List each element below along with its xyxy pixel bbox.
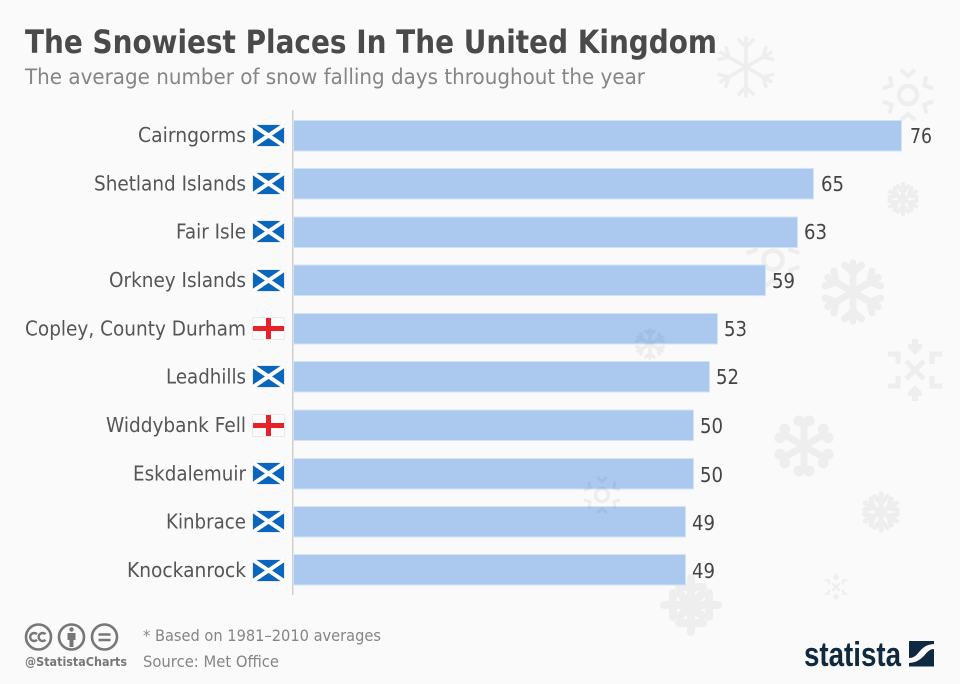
row: Cairngorms: Cairngorms xyxy=(138,123,246,147)
snowflake: dense lower right xyxy=(862,494,900,530)
row: Cairngorms xyxy=(138,120,932,151)
snowflake: bottom cross xyxy=(664,578,718,632)
row: Shetland Islands: Shetland Islands xyxy=(94,172,246,196)
footnote: * Based on 1981–2010 averages xyxy=(143,626,381,645)
row: Knockanrock: Knockanrock xyxy=(127,558,246,582)
row: Fair Isle: Fair Isle xyxy=(176,220,246,244)
row: Kinbrace: Kinbrace xyxy=(166,510,246,534)
row: Eskdalemuir: 50 xyxy=(700,463,723,487)
snowflake: arrows right xyxy=(888,339,942,401)
row: Eskdalemuir xyxy=(133,458,723,489)
row: Leadhills xyxy=(166,362,739,392)
snowflake: tiny arrows xyxy=(825,574,847,600)
row: Leadhills: Leadhills xyxy=(166,364,246,388)
handle: @StatistaCharts xyxy=(25,654,127,669)
row: Shetland Islands xyxy=(94,168,844,199)
row: Widdybank Fell: Widdybank Fell xyxy=(106,413,246,437)
snowflake: top right sun xyxy=(883,70,933,120)
row: Knockanrock: 49 xyxy=(692,559,715,583)
row: Kinbrace xyxy=(166,506,715,537)
snowflake: small dense right xyxy=(887,184,919,214)
creative commons icons xyxy=(26,624,117,650)
row: Widdybank Fell xyxy=(106,410,723,440)
statista logo: statista xyxy=(804,636,902,674)
row: Knockanrock xyxy=(127,554,715,585)
snowflake: over bar, centre xyxy=(636,330,664,358)
snowflake: heart ends xyxy=(772,416,836,476)
row: Orkney Islands xyxy=(109,265,795,296)
row: Leadhills: 52 xyxy=(716,365,739,389)
row: Copley, County Durham: 53 xyxy=(724,317,747,341)
row: Kinbrace: 49 xyxy=(692,511,715,535)
row: Shetland Islands: 65 xyxy=(821,172,844,196)
subtitle: The average number of snow falling days throughout the year xyxy=(24,65,645,90)
row: Copley, County Durham: Copley, County Durham xyxy=(25,316,246,340)
row: Widdybank Fell: 50 xyxy=(700,414,723,438)
row: Orkney Islands: Orkney Islands xyxy=(109,268,246,292)
row: Fair Isle: 63 xyxy=(804,220,827,244)
bar chart xyxy=(25,120,932,585)
snowflake: behind bars xyxy=(747,234,799,286)
row: Cairngorms: 76 xyxy=(910,124,932,148)
snowflake: thick right xyxy=(823,263,883,321)
row: Orkney Islands: 59 xyxy=(772,269,795,293)
row: Fair Isle xyxy=(176,217,827,248)
source: Source: Met Office xyxy=(143,652,279,671)
axis line xyxy=(292,110,294,595)
snowflake: top thin xyxy=(717,38,775,96)
row: Copley, County Durham xyxy=(25,314,747,344)
title: The Snowiest Places In The United Kingdom xyxy=(25,23,717,61)
row: Eskdalemuir: Eskdalemuir xyxy=(133,462,247,486)
snowflake: over bar, lower xyxy=(584,477,620,513)
